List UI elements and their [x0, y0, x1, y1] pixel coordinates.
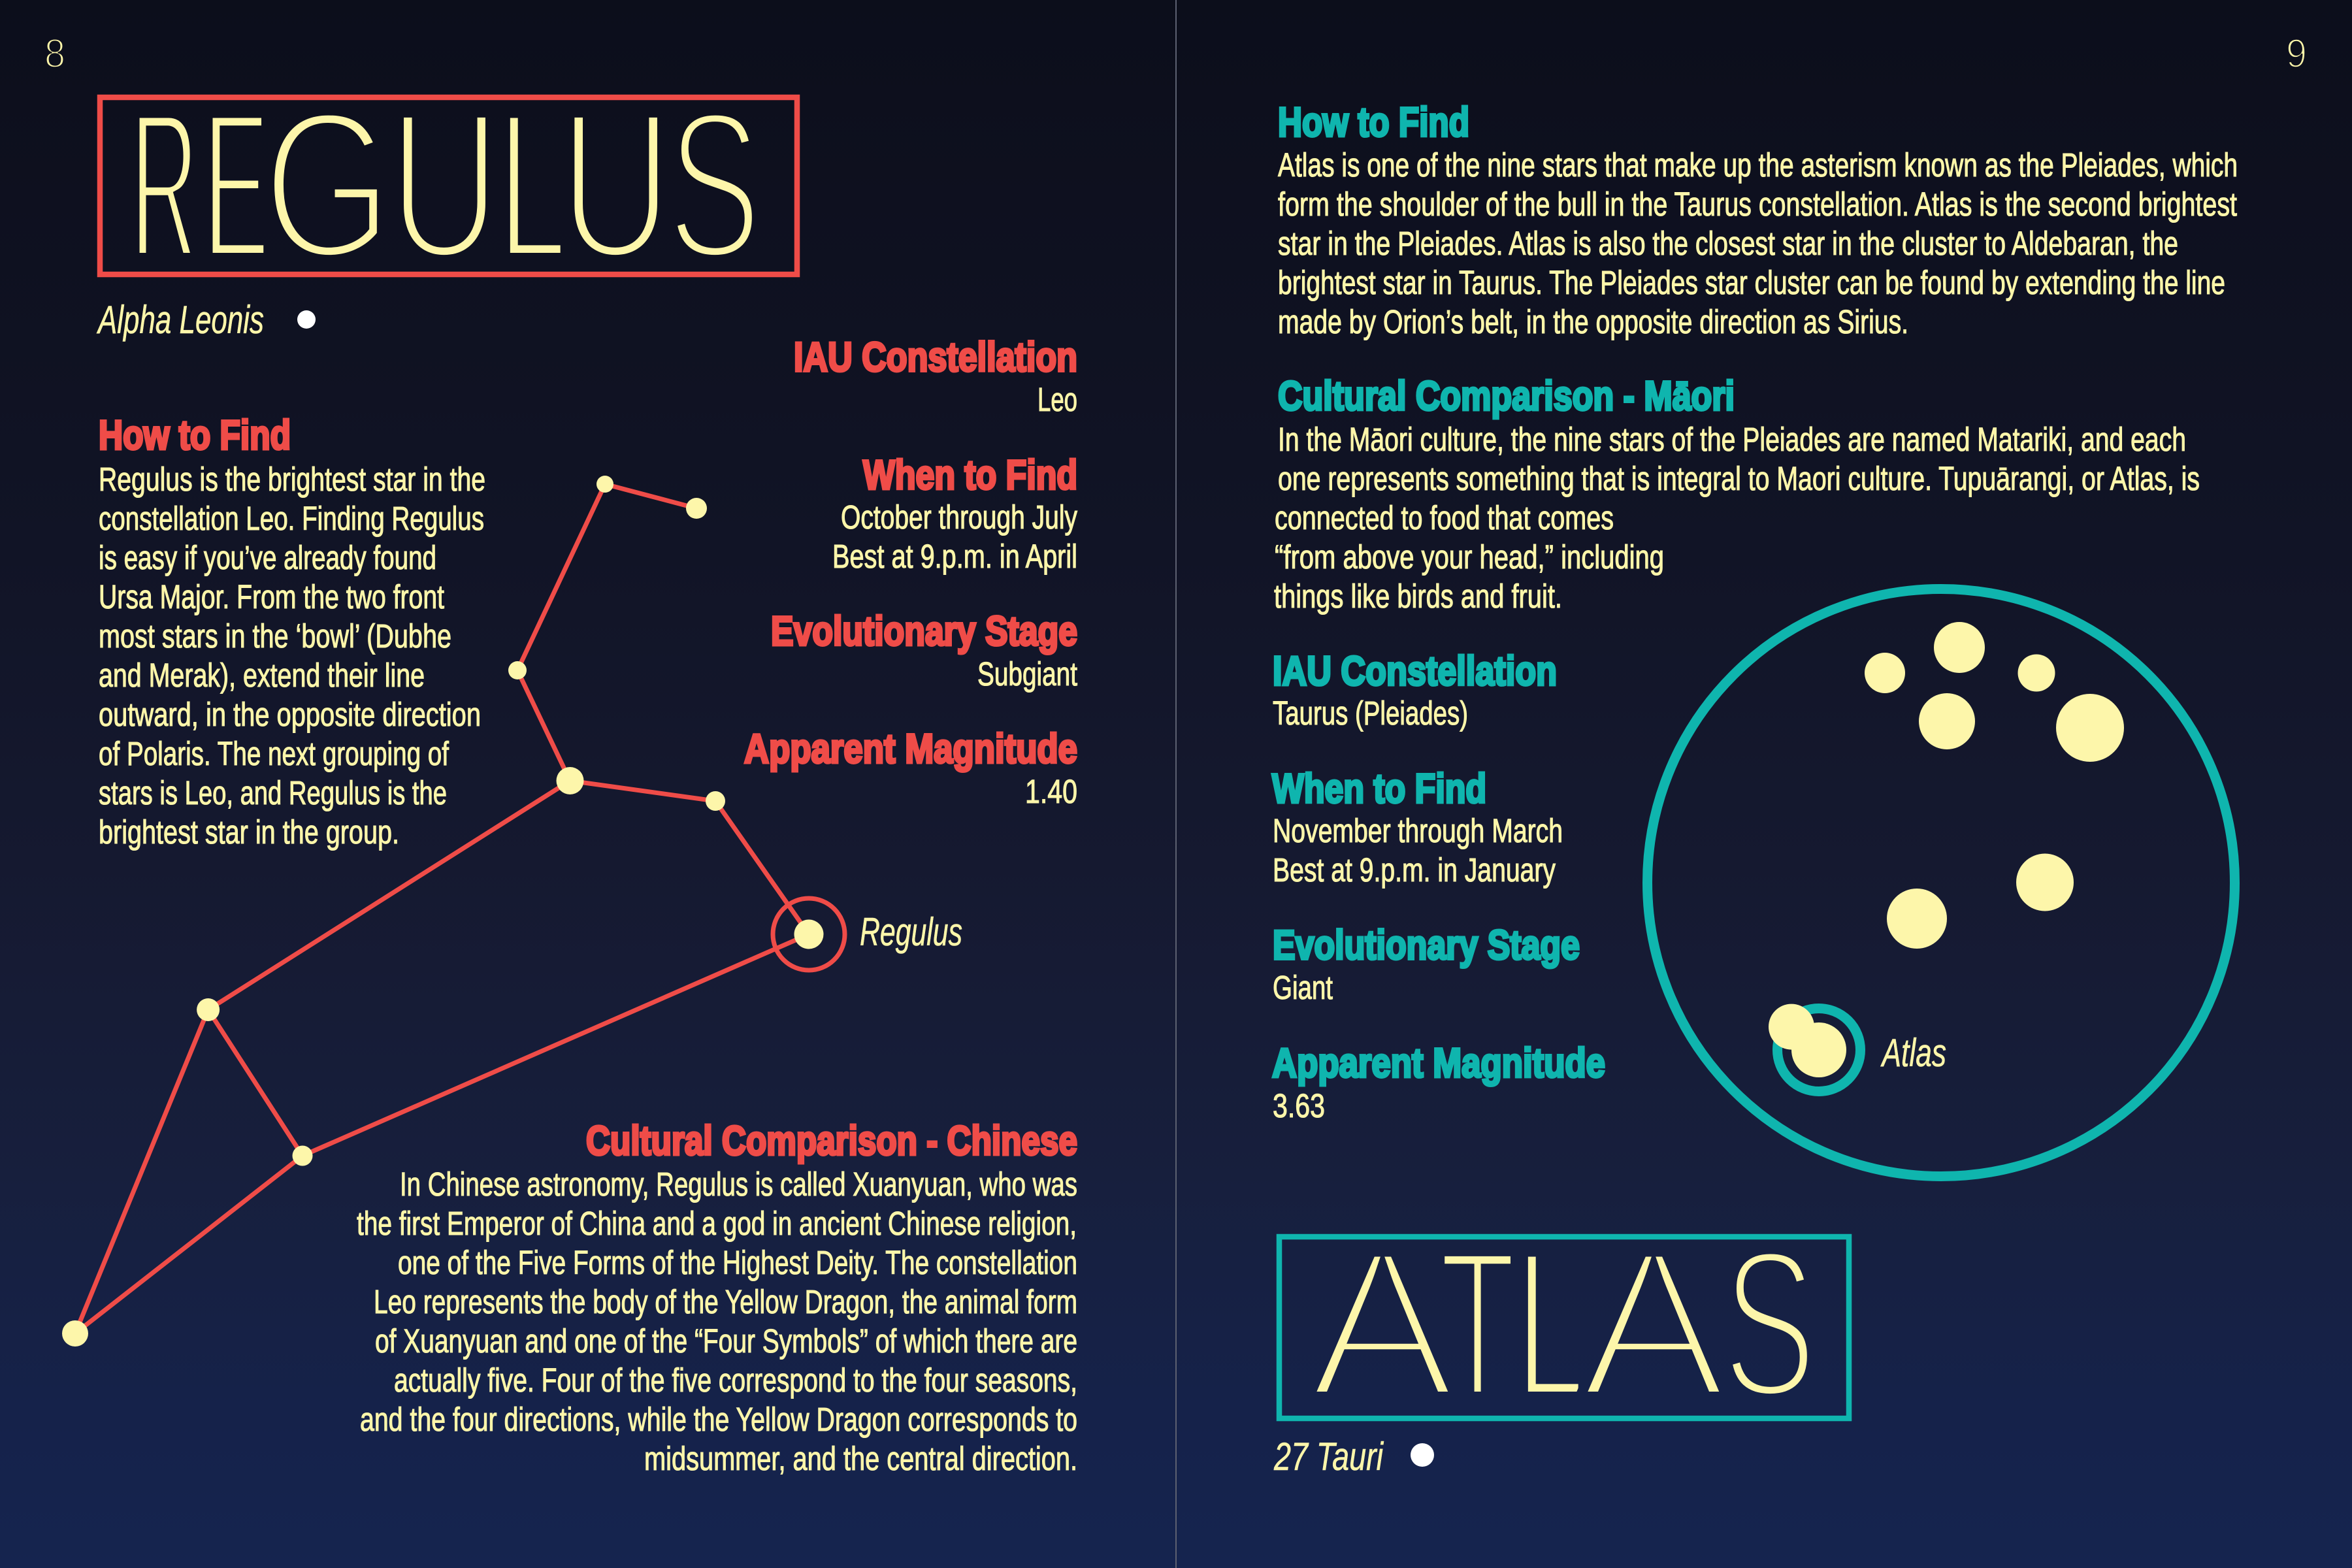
subtitle: alpha leonis: Alpha Leonis — [97, 298, 264, 342]
title box: atlas — [1279, 1237, 1849, 1418]
text block: cultural comparison maori: things like birds and fruit. — [1274, 578, 1562, 615]
fact: evolutionary stage: Subgiant — [977, 655, 1077, 693]
title: ATLAS: A — [1580, 1206, 1728, 1441]
text block: how to find: made by Orion’s belt, in the opposite direction as Sirius. — [1278, 303, 1908, 340]
fact: when to find: Best at 9.p.m. in January — [1273, 851, 1556, 889]
text block: cultural comparison chinese: In Chinese astronomy, Regulus is called Xuanyuan, who was — [400, 1166, 1077, 1203]
subtitle: 27 tauri: 27 Tauri — [1273, 1435, 1384, 1478]
text block: cultural comparison maori — [1274, 374, 2200, 615]
fact: evolutionary stage — [1273, 923, 1580, 1006]
text block: how to find: and Merak), extend their line — [99, 657, 425, 694]
title: ATLAS: T — [1439, 1207, 1516, 1440]
title: ATLAS: A — [1309, 1206, 1457, 1441]
fact: evolutionary stage: Giant — [1273, 969, 1333, 1006]
text block: how to find — [99, 413, 485, 851]
title: REGULUS — [129, 62, 761, 309]
fact: iau constellation — [794, 335, 1077, 418]
icon: white star dot — [297, 310, 316, 329]
text block: cultural comparison chinese: midsummer, and the central direction. — [644, 1440, 1077, 1477]
heading: how to find: How to Find — [99, 413, 291, 459]
star label: atlas: Atlas — [1880, 1031, 1946, 1075]
title: REGULUS: U — [389, 68, 500, 302]
facts: atlas — [1272, 648, 1605, 1124]
text block: cultural comparison chinese: actually five. Four of the five correspond to the four seasons, — [394, 1362, 1077, 1399]
title: REGULUS: G — [263, 69, 393, 302]
text block: cultural comparison maori: “from above your head,” including — [1275, 538, 1664, 576]
title: REGULUS: E — [202, 62, 272, 309]
fact: apparent magnitude — [744, 727, 1077, 810]
fact: when to find — [1272, 766, 1563, 889]
text block: how to find: brightest star in the group. — [99, 813, 399, 851]
fact: apparent magnitude: 1.40 — [1025, 773, 1077, 810]
text block: how to find: of Polaris. The next grouping of — [99, 735, 449, 772]
text block: cultural comparison maori: connected to food that comes — [1275, 499, 1614, 536]
fact: apparent magnitude: 3.63 — [1273, 1087, 1325, 1124]
facts: regulus — [744, 335, 1077, 810]
fact: when to find: When to Find — [1272, 766, 1486, 811]
title: ATLAS: L — [1516, 1201, 1586, 1448]
fact: apparent magnitude: Apparent Magnitude — [1272, 1040, 1605, 1086]
fact: apparent magnitude: Apparent Magnitude — [744, 727, 1077, 772]
panel: atlas page — [1272, 31, 2307, 1478]
fact: evolutionary stage: Evolutionary Stage — [771, 609, 1077, 655]
fact: iau constellation: Leo — [1037, 381, 1077, 418]
text block: how to find: constellation Leo. Finding Regulus — [99, 500, 484, 537]
text block: cultural comparison chinese — [357, 1119, 1077, 1477]
title: ATLAS: S — [1723, 1206, 1816, 1441]
text block: how to find: outward, in the opposite direction — [99, 696, 481, 733]
text block: how to find: Regulus is the brightest star in the — [99, 461, 485, 498]
fact: iau constellation: Taurus (Pleiades) — [1273, 694, 1468, 732]
fact: when to find — [832, 452, 1077, 575]
fact: when to find: Best at 9.p.m. in April — [832, 538, 1077, 575]
text block: how to find: most stars in the ‘bowl’ (Dubhe — [99, 617, 451, 655]
icon: white star dot — [1411, 1443, 1434, 1467]
text block: how to find: Ursa Major. From the two front — [99, 578, 444, 615]
text block: cultural comparison chinese: the first Emperor of China and a god in ancient Chinese religion, — [357, 1205, 1077, 1242]
text block: cultural comparison chinese: Leo represents the body of the Yellow Dragon, the animal form — [374, 1283, 1077, 1320]
fact: apparent magnitude — [1272, 1040, 1605, 1124]
fact: iau constellation: IAU Constellation — [1273, 648, 1557, 694]
heading: cultural comparison chinese: Cultural Comparison - Chinese — [586, 1119, 1077, 1164]
constellation diagram: leo — [62, 476, 845, 1347]
heading: how to find: How to Find — [1278, 99, 1469, 145]
page number 9: 9 — [2286, 31, 2307, 76]
fact: when to find: October through July — [841, 498, 1077, 536]
title: REGULUS: L — [498, 62, 568, 309]
text block: cultural comparison chinese: and the four directions, while the Yellow Dragon corresponds to — [360, 1401, 1077, 1438]
fact: iau constellation: IAU Constellation — [794, 335, 1077, 380]
heading: cultural comparison maori: Cultural Comparison - Māori — [1278, 374, 1735, 419]
fact: evolutionary stage: Evolutionary Stage — [1273, 923, 1580, 968]
text block: how to find: is easy if you’ve already found — [99, 539, 436, 576]
panel: regulus page — [44, 31, 1077, 1477]
star label: regulus: Regulus — [860, 910, 962, 954]
fact: evolutionary stage — [771, 609, 1077, 693]
text block: cultural comparison chinese: one of the Five Forms of the Highest Deity. The constellation — [398, 1244, 1077, 1281]
page number 8: 8 — [44, 31, 65, 76]
title: REGULUS: U — [559, 68, 672, 301]
fact: when to find: When to Find — [863, 452, 1077, 498]
text block: how to find — [1278, 99, 2238, 340]
fact: iau constellation — [1273, 648, 1557, 732]
star cluster diagram: pleiades — [1648, 589, 2234, 1176]
title: ATLAS — [1309, 1201, 1816, 1448]
title: REGULUS: S — [668, 67, 761, 302]
text block: how to find: stars is Leo, and Regulus is the — [99, 774, 447, 811]
title box: regulus — [100, 97, 797, 274]
fact: when to find: November through March — [1273, 812, 1563, 849]
title: REGULUS: R — [129, 62, 199, 309]
text block: cultural comparison chinese: of Xuanyuan and one of the “Four Symbols” of which there are — [375, 1322, 1077, 1360]
